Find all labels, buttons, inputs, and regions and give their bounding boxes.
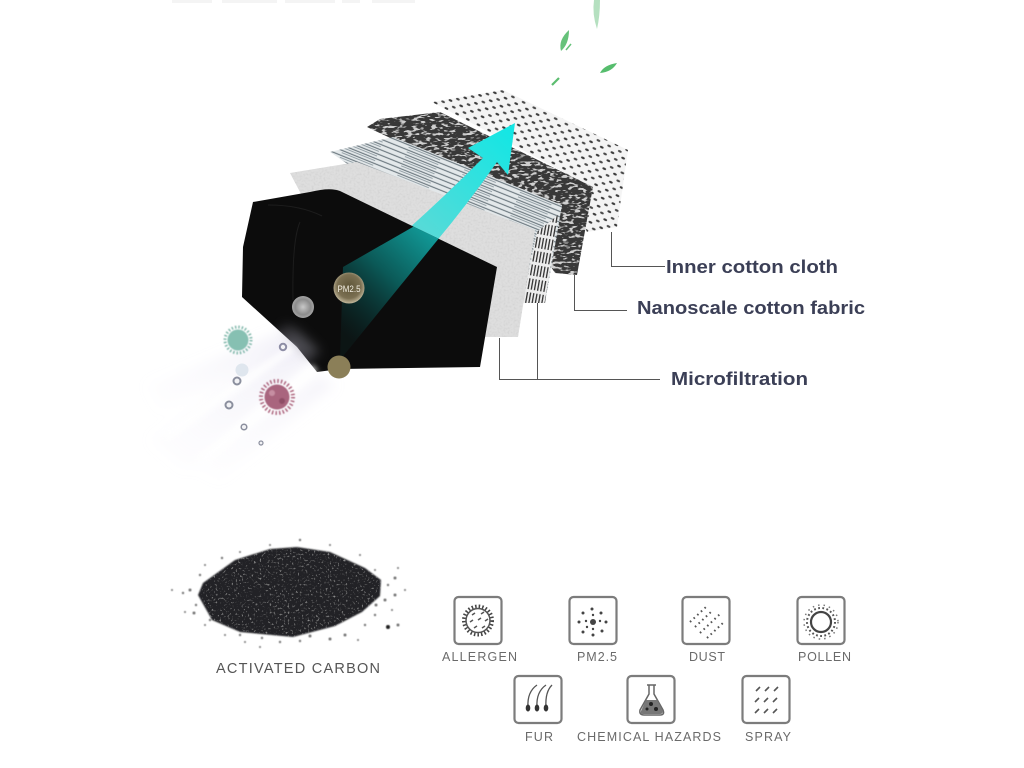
label: dust: DUST: [689, 650, 725, 664]
callout line: nanoscale cotton fabric: [574, 275, 627, 310]
label: spray: SPRAY: [745, 730, 792, 744]
label: chemical hazards: CHEMICAL HAZARDS: [577, 730, 721, 744]
faint cropped header text: [172, 0, 415, 3]
label: PM2.5: PM2.5: [577, 650, 617, 664]
black mask front: [242, 189, 497, 372]
icon card: allergen: [454, 597, 502, 644]
icon card: fur: [514, 676, 562, 723]
arrow: bright part above mask: [342, 123, 515, 357]
mask layer: stripe filtration sheet: [330, 137, 562, 303]
mask seam details: [268, 205, 322, 300]
arrow: dark teal part over mask: [340, 226, 438, 356]
callout line: inner cotton cloth: [612, 232, 665, 266]
label: inner cotton cloth: Inner cotton cloth: [666, 257, 838, 277]
icon: teal virus: [225, 327, 251, 353]
icon card: spray: [742, 676, 790, 723]
label: pollen: POLLEN: [798, 650, 851, 664]
icon: droplets: [226, 344, 286, 445]
air stream rays: [148, 330, 335, 480]
icon: grey particle: [292, 296, 314, 318]
label: activated carbon: ACTIVATED CARBON: [216, 661, 380, 677]
icon: pale droplet: [236, 364, 248, 376]
mask layer: inner cotton cloth: [432, 90, 628, 232]
label: nanoscale cotton fabric: Nanoscale cotton fabric: [637, 298, 865, 318]
mask layer: microfiltration sheet: [290, 162, 535, 337]
label: allergen: ALLERGEN: [442, 650, 517, 664]
icon card: chemical hazards: [628, 676, 674, 723]
icon: PM2.5 particle: [334, 272, 364, 304]
mask layer: nanoscale cotton fabric: [367, 112, 593, 275]
icon: pink virus: [261, 381, 293, 413]
icon card: dust: [682, 597, 730, 644]
label: fur: FUR: [525, 730, 553, 744]
white air streaks: [160, 345, 318, 465]
activated carbon pile: [171, 539, 406, 648]
label: microfiltration: Microfiltration: [671, 369, 808, 389]
icon: green leaves: [552, 0, 617, 85]
icon: small gold particle: [328, 356, 350, 378]
icon: PM2.5 particle: PM2.5: [338, 284, 360, 295]
icon card: pollen: [798, 597, 844, 644]
callout lines: microfiltration: [500, 303, 660, 380]
air stream on mask: [282, 325, 320, 358]
icon card: PM2.5: [570, 597, 616, 644]
